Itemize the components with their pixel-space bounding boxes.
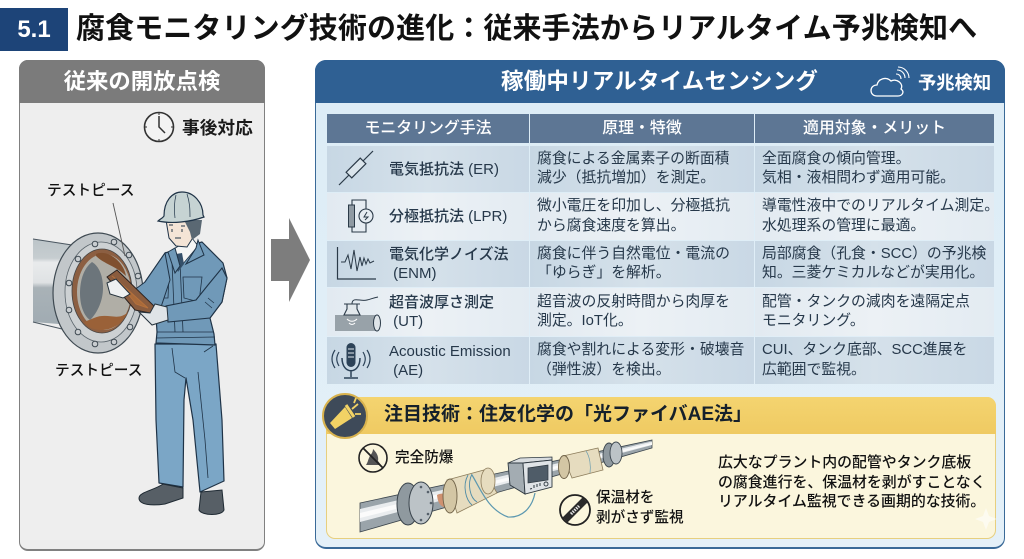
right flange xyxy=(603,443,615,467)
illustration: worker with pipe flange xyxy=(32,191,228,515)
row: AE: (AE) xyxy=(393,362,423,378)
icon: noise waveform xyxy=(336,247,376,280)
icon: no insulation removal xyxy=(559,494,591,526)
title: 腐食モニタリング技術の進化：従来手法からリアルタイム予兆検知へ xyxy=(76,13,977,45)
row: ENM: 腐食に伴う自然電位・電流の xyxy=(537,246,730,262)
predictive detection label: 予兆検知 xyxy=(918,72,991,93)
row: LPR: 導電性液中でのリアルタイム測定。 xyxy=(762,198,999,214)
reactive maintenance label: 事後対応 xyxy=(182,118,253,138)
shoes xyxy=(139,484,183,505)
sleeve left xyxy=(128,253,170,310)
label: test piece upper: テストピース xyxy=(47,183,134,199)
insulation left xyxy=(447,470,497,513)
row: UT: (UT) xyxy=(393,313,423,330)
row: ENM xyxy=(327,241,994,287)
row: LPR: から腐食速度を算出。 xyxy=(537,218,685,234)
heading text: 稼働中リアルタイムセンシング xyxy=(501,69,818,94)
label: monitor without removing insulation: 剥がさず監視 xyxy=(596,510,684,526)
row: LPR: 微小電圧を印加し、分極抵抗 xyxy=(537,198,730,214)
icon: polarization circuit xyxy=(348,200,374,232)
callout: featured technology xyxy=(326,397,996,539)
table header: 適用対象・メリット xyxy=(803,120,946,137)
section number badge: 5.1 xyxy=(17,16,51,43)
row: ER: 全面腐食の傾向管理。 xyxy=(762,150,910,166)
callout description: の腐食進行を、保温材を剥がすことなく xyxy=(718,475,986,491)
table header: モニタリング手法 xyxy=(364,120,492,137)
pipe xyxy=(360,440,652,532)
trousers xyxy=(155,344,224,492)
hard hat xyxy=(158,192,204,222)
icon: spotlight badge xyxy=(322,393,368,439)
sensor cable xyxy=(472,475,535,517)
leader line xyxy=(113,203,125,256)
label: test piece lower: テストピース xyxy=(55,363,142,379)
panel: real-time sensing xyxy=(315,60,1005,549)
insulation right xyxy=(563,448,603,478)
callout description xyxy=(718,454,986,510)
forearm right xyxy=(166,268,227,322)
row: ENM: (ENM) xyxy=(393,265,436,282)
section number badge xyxy=(0,8,68,51)
callout heading: 注目技術：住友化学の「光ファイバAE法」 xyxy=(384,404,752,425)
row: AE: 腐食や割れによる変形・破壊音 xyxy=(537,342,744,358)
row: LPR: 水処理系の管理に最適。 xyxy=(762,218,925,234)
icon: explosion proof xyxy=(358,443,388,473)
table header xyxy=(327,114,994,143)
row: ER xyxy=(327,146,994,192)
callout description: リアルタイム監視できる画期的な技術。 xyxy=(718,494,985,510)
icon: microphone xyxy=(331,343,371,379)
row: UT: 超音波厚さ測定 xyxy=(389,294,494,311)
label: explosion proof: 完全防爆 xyxy=(395,450,453,466)
row: UT: 超音波の反射時間から肉厚を xyxy=(537,294,730,310)
row: UT xyxy=(335,288,970,336)
row: ER: 減少（抵抗増加）を測定。 xyxy=(537,170,715,186)
illustration: fiber AE pipe xyxy=(360,440,652,532)
row: ENM: 「ゆらぎ」を解析。 xyxy=(537,265,671,281)
comparison table xyxy=(327,114,999,384)
pipe body xyxy=(33,239,85,326)
icon: resistor xyxy=(338,150,374,186)
row: AE: Acoustic Emission xyxy=(389,342,511,360)
callout header band xyxy=(326,397,996,434)
label: monitor without removing insulation xyxy=(596,489,684,526)
test piece xyxy=(107,270,155,313)
flange xyxy=(53,233,143,353)
panel: conventional open inspection xyxy=(19,60,265,551)
row: UT: 測定。IoT化。 xyxy=(537,313,633,329)
gloves xyxy=(107,279,130,298)
arrow xyxy=(271,218,310,302)
row: ER: 電気抵抗法 (ER) xyxy=(389,160,499,178)
panel heading: conventional: 従来の開放点検 xyxy=(64,69,220,94)
row: ENM: 局部腐食（孔食・SCC）の予兆検 xyxy=(762,246,986,262)
neck and shirt xyxy=(172,238,198,265)
icon: cloud signal xyxy=(870,66,910,97)
row: AE xyxy=(327,337,994,384)
left flange xyxy=(397,483,419,525)
row: ER: 気相・液相問わず適用可能。 xyxy=(762,170,955,186)
monitor device xyxy=(508,457,552,463)
row: UT: モニタリング。 xyxy=(762,313,865,329)
row: AE: 広範囲で監視。 xyxy=(762,362,866,378)
jacket xyxy=(145,242,227,345)
table header: 原理・特徴 xyxy=(602,120,682,137)
icon: clock xyxy=(144,112,174,142)
rust patch xyxy=(437,494,454,508)
callout description: 広大なプラント内の配管やタンク底板 xyxy=(718,455,971,471)
label: monitor without removing insulation: 保温材を xyxy=(596,490,654,506)
row: ENM: 知。三菱ケミカルなどが実用化。 xyxy=(762,265,984,281)
row: ENM: 電気化学ノイズ法 xyxy=(389,246,509,263)
row: UT: 配管・タンクの減肉を遠隔定点 xyxy=(762,294,970,310)
row: LPR xyxy=(348,193,999,240)
panel heading: conventional xyxy=(19,60,265,103)
panel heading: real-time sensing xyxy=(315,60,1005,103)
row: ER: 腐食による金属素子の断面積 xyxy=(537,150,730,166)
icon: ultrasonic sensor on pipe xyxy=(335,296,381,332)
head xyxy=(166,220,194,247)
row: AE: （弾性波）を検出。 xyxy=(537,362,671,378)
row: LPR: 分極抵抗法 (LPR) xyxy=(389,208,507,225)
row: AE: CUI、タンク底部、SCC進展を xyxy=(762,342,967,358)
